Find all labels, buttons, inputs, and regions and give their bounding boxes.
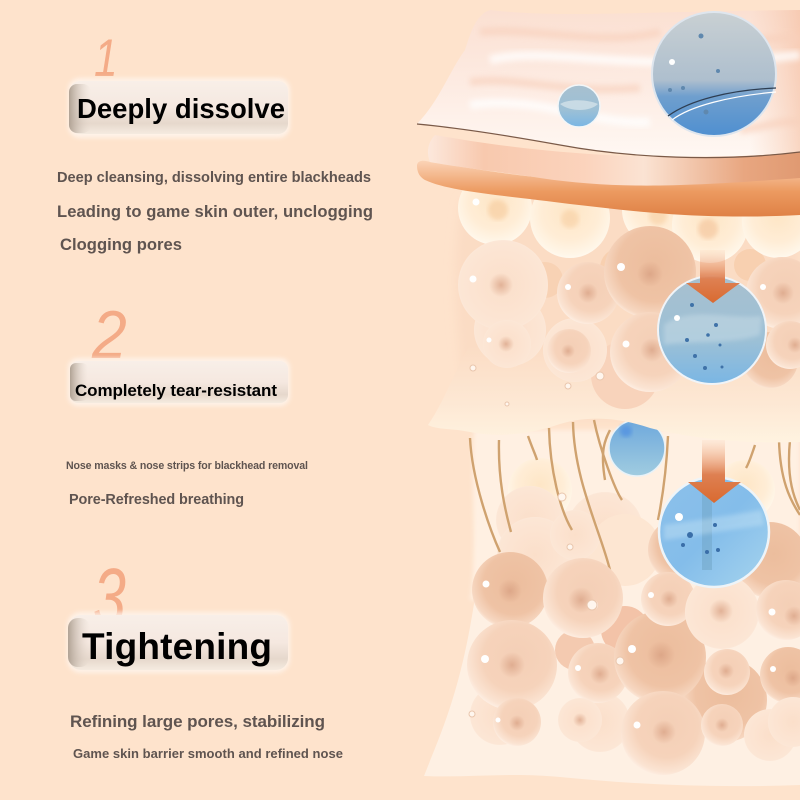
top translucent sheet bbox=[417, 10, 800, 157]
upper cell cluster bbox=[458, 171, 800, 392]
lower backing tissue bbox=[470, 430, 800, 600]
large blue ball bbox=[652, 12, 776, 136]
section 2 bbox=[66, 297, 308, 508]
label pill: Tightening bbox=[67, 612, 290, 673]
description lines 2: Nose masks & nose strips for blackhead removal bbox=[66, 460, 308, 472]
section 1 bbox=[57, 30, 373, 254]
label pill: Tightening: Tightening bbox=[82, 626, 272, 667]
droplets on middle sheet bbox=[469, 365, 624, 717]
label pill: Completely tear-resistant: Completely tear-resistant bbox=[75, 381, 277, 400]
back pale cells upper bbox=[474, 248, 798, 409]
lower cell cluster bbox=[467, 552, 800, 775]
label pill: Completely tear-resistant bbox=[68, 358, 290, 406]
label pill: Deeply dissolve: Deeply dissolve bbox=[77, 93, 285, 124]
number 1: 1 bbox=[94, 30, 118, 88]
right shade on sheet bbox=[600, 10, 800, 157]
orange skin band bbox=[417, 161, 800, 217]
arrow: downward to middle ball bbox=[686, 250, 740, 303]
description lines 1 bbox=[57, 170, 373, 254]
hair strands bbox=[470, 420, 800, 570]
description lines 2 bbox=[66, 460, 308, 508]
skin cross-section illustration bbox=[417, 10, 800, 786]
label pill: Deeply dissolve bbox=[68, 78, 290, 138]
sheet folds bbox=[470, 55, 800, 122]
back pale cells lower bbox=[470, 458, 800, 761]
description lines 2: Pore-Refreshed breathing bbox=[69, 492, 244, 508]
description lines 1: Clogging pores bbox=[60, 235, 182, 254]
middle skin sheet bbox=[428, 345, 800, 442]
section 3 bbox=[67, 552, 343, 761]
description lines 3: Game skin barrier smooth and refined nose bbox=[73, 746, 343, 761]
middle blue ball bbox=[658, 276, 766, 384]
number 2: 2 bbox=[91, 297, 127, 373]
peach under-layer bbox=[428, 135, 800, 186]
description lines 3 bbox=[70, 712, 343, 761]
bottom skin sheet bbox=[424, 590, 800, 786]
description lines 3: Refining large pores, stabilizing bbox=[70, 712, 325, 731]
small blue droplet bbox=[558, 85, 600, 127]
lower blue ball bbox=[659, 477, 769, 587]
arrow: downward to lower ball bbox=[688, 440, 741, 503]
small blue ball lower bbox=[609, 420, 665, 476]
number 3: 3 bbox=[93, 552, 126, 643]
description lines 1: Deep cleansing, dissolving entire blackheads bbox=[57, 170, 371, 186]
sheet edge line bbox=[417, 124, 800, 158]
upper backing tissue bbox=[455, 200, 800, 420]
description lines 1: Leading to game skin outer, unclogging bbox=[57, 202, 373, 221]
